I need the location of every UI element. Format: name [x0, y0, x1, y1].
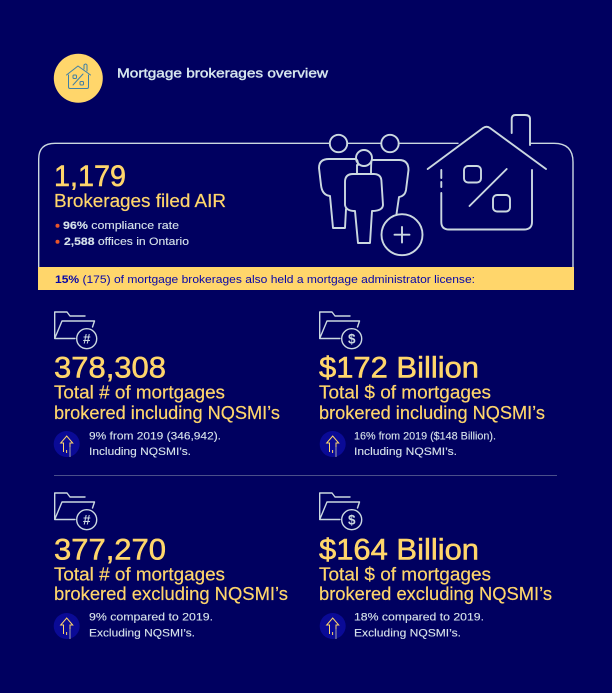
- description: Total $ of mortgages: [319, 564, 491, 585]
- icon: folder with dollar: [320, 312, 362, 349]
- icon: up arrow: [54, 431, 80, 457]
- icon: yellow house badge: [54, 54, 103, 103]
- icon: folder with dollar: [320, 493, 362, 530]
- stat: 1,179: 1,179: [54, 160, 126, 193]
- value: 377,270: [54, 533, 166, 566]
- stat block: number of mortgages including NQSMI: [54, 312, 280, 458]
- value: $164 Billion: [319, 533, 479, 566]
- description: Total # of mortgages: [54, 564, 225, 585]
- panel: brokerages filed AIR: [38, 115, 574, 290]
- stat block: dollars of mortgages excluding NQSMI: brokered excluding NQSMI’s: [319, 583, 552, 604]
- icon: up arrow: [320, 431, 346, 457]
- icon: house with percent: [428, 115, 546, 230]
- label: brokerages filed AIR: Brokerages filed AIR: [54, 190, 226, 211]
- description: Total # of mortgages: [54, 382, 225, 402]
- stat block: dollars of mortgages excluding NQSMI: [319, 493, 552, 640]
- stat block: number of mortgages excluding NQSMI: Excluding NQSMI’s.: [89, 628, 195, 640]
- stat block: dollars of mortgages including NQSMI: [319, 312, 545, 458]
- stat block: dollars of mortgages including NQSMI: Including NQSMI’s.: [354, 446, 457, 458]
- icon: folder with dollar: $: [348, 332, 356, 346]
- icon: folder with hash: [55, 312, 97, 349]
- bullet: offices: 2,588 offices in Ontario: [64, 236, 189, 248]
- value: 378,308: [54, 352, 166, 384]
- icon: people with plus: [319, 135, 422, 255]
- stat block: number of mortgages including NQSMI: brokered including NQSMI’s: [54, 402, 280, 423]
- change note: 18% compared to 2019.: [354, 612, 484, 624]
- change note: 16% from 2019 ($148 Billion).: [354, 430, 496, 442]
- stat block: number of mortgages including NQSMI: Including NQSMI’s.: [89, 446, 191, 458]
- stat block: dollars of mortgages excluding NQSMI: Excluding NQSMI’s.: [354, 628, 461, 640]
- icon: up arrow: [320, 613, 346, 639]
- change note: 9% compared to 2019.: [89, 612, 213, 624]
- callout bar: administrator license: [38, 267, 574, 290]
- panel outline: [39, 143, 573, 267]
- value: $172 Billion: [319, 352, 479, 384]
- description: Total $ of mortgages: [319, 382, 491, 402]
- header: section title with icon: [54, 54, 329, 103]
- stat block: number of mortgages excluding NQSMI: [54, 493, 288, 640]
- icon: folder with dollar: $: [348, 512, 356, 528]
- callout bar: administrator license: 15% (175) of mortgage brokerages also held a mortgage administrator license:: [55, 274, 475, 286]
- stat block: dollars of mortgages including NQSMI: brokered including NQSMI’s: [319, 402, 545, 423]
- icon: folder with hash: [55, 493, 97, 530]
- change note: 9% from 2019 (346,942).: [89, 430, 221, 442]
- stat block: number of mortgages excluding NQSMI: brokered excluding NQSMI’s: [54, 583, 288, 604]
- icon: up arrow: [54, 613, 80, 639]
- icon: folder with hash: #: [83, 332, 91, 346]
- icon: folder with hash: #: [83, 512, 91, 528]
- heading: Mortgage brokerages overview: [117, 66, 329, 80]
- bullet: compliance rate: 96% compliance rate: [63, 220, 179, 232]
